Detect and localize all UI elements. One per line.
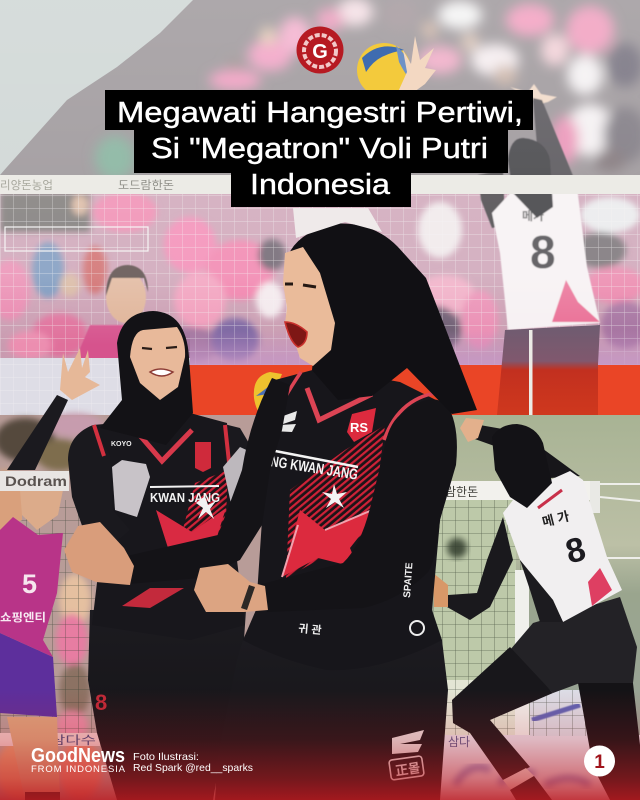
left player left fist (112, 460, 150, 517)
main player left fist (64, 522, 134, 585)
left player left arm (68, 425, 130, 552)
blocker jersey name: 메가 (522, 208, 544, 223)
left player mouth (150, 369, 173, 376)
left player hijab (100, 311, 193, 445)
right player bent leg (452, 647, 553, 780)
blocker raised arm (533, 98, 578, 188)
bottom red fade overlay (0, 690, 640, 800)
main player neck trim (307, 388, 372, 420)
photo credit (133, 751, 253, 774)
lower arena: floor and blurred spectators (0, 413, 640, 800)
left player right shoulder (224, 424, 253, 480)
right player raised arm (472, 424, 580, 478)
photo credit: Red Spark @red__sparks (133, 762, 253, 774)
magenta jersey (0, 517, 63, 657)
footer brand: GoodNews from Indonesia (31, 745, 126, 775)
main player wristband (241, 585, 255, 610)
left player kit logo: KOYO (111, 441, 132, 448)
blocker raised hand (510, 84, 557, 104)
right player jersey side print (520, 560, 563, 622)
lavender advertising board at bottom right (440, 690, 640, 800)
left player collar (137, 430, 192, 461)
lower right player from behind (433, 418, 640, 800)
right player lower arm (447, 517, 513, 620)
main player open mouth (285, 322, 307, 347)
left player right fist (223, 447, 253, 513)
left player hem stripes (122, 588, 184, 608)
photo credit: Foto Ilustrasi: (133, 751, 199, 763)
magenta player shoe (25, 792, 60, 800)
footer brand: GoodNews from Indonesia: FROM INDONESIA (31, 764, 126, 775)
lower arena: floor and blurred spectators: 삼다수 (50, 734, 96, 747)
left player shoulder trim (94, 425, 229, 462)
right player collar print (538, 490, 562, 508)
volleyball top (357, 43, 411, 97)
main player sleeve print: SPAITE (402, 562, 415, 598)
Dodram banner: Dodram (5, 473, 67, 489)
small volleyball mid (254, 372, 282, 418)
main player Skechers logo (271, 411, 297, 432)
crowd behind the net (0, 190, 640, 370)
page number badge (584, 746, 615, 776)
main player left arm (127, 378, 290, 584)
right player hijab (492, 424, 552, 508)
main player shorts (215, 640, 448, 800)
main player right arm (262, 399, 457, 612)
veil fading the upper photo (0, 0, 640, 345)
title line 3: Indonesia (250, 169, 391, 201)
main player shoulder trim (273, 372, 444, 440)
left magenta player with ad banner (0, 471, 69, 800)
footer brand: GoodNews from Indonesia: GoodNews (31, 745, 125, 767)
left player torso (92, 413, 245, 640)
main player red star (282, 505, 384, 577)
logo: GoodNews red circle (296, 26, 344, 74)
right player hand (433, 573, 448, 607)
main player shorts logo (389, 730, 424, 780)
purple haze above red board (190, 330, 640, 366)
left net mesh (5, 227, 148, 251)
main player torso (243, 368, 446, 670)
main player star outline (282, 505, 384, 577)
logo: GoodNews red circle: G (312, 41, 328, 63)
right player jersey (503, 471, 622, 622)
main player badge: RS (350, 420, 368, 435)
right player jersey number: 8 (562, 530, 589, 571)
magenta player arm skin (0, 490, 22, 530)
right player far leg (578, 683, 640, 800)
magenta jersey sponsor: 쇼핑엔티 (0, 611, 46, 624)
left player shorts and legs (88, 610, 246, 800)
blocking hand at ball (398, 36, 436, 92)
left player white star (196, 496, 216, 519)
main player sponsor line (270, 450, 358, 467)
lower boards: white and red (0, 358, 640, 415)
main player badge (347, 408, 376, 442)
left player eyes (142, 347, 177, 349)
blocker jersey pink star (552, 280, 600, 322)
right player jersey pink star (588, 568, 612, 606)
main player shorts logo: 正몰 (394, 760, 421, 778)
magenta jersey number: 5 (22, 569, 37, 599)
blocker in white jersey (478, 84, 600, 330)
blocker other arm (478, 170, 505, 228)
main player hijab (286, 223, 477, 414)
left player red star (156, 508, 226, 548)
right player jersey name: 메 가 (541, 508, 571, 530)
blocker shorts (497, 325, 600, 415)
net panel on lower right: 람한돈 (445, 485, 478, 499)
main player: Megawati (64, 208, 477, 800)
main player hem crest (410, 621, 424, 635)
main player face (283, 247, 335, 366)
main player hem text: 귀 관 (298, 622, 322, 637)
blocker hijab (508, 138, 553, 218)
left player raised hand (60, 348, 102, 400)
left player sponsor text: KWAN JANG (150, 490, 220, 505)
ad band above net: 도드람한돈 (118, 179, 174, 192)
left player badge (195, 442, 211, 472)
left player jersey stripes (178, 470, 228, 548)
left player shorts number: 8 (95, 690, 107, 715)
main player white star (322, 484, 347, 508)
left player raised arm (7, 395, 68, 470)
magenta player face (20, 490, 63, 530)
net panel on lower right (434, 481, 640, 740)
ad band above net (0, 175, 640, 194)
main player jersey stripes (286, 425, 385, 578)
background player behind the net (75, 265, 170, 360)
left player celebrating (7, 311, 253, 800)
left player sponsor line (150, 486, 219, 487)
Dodram banner (0, 471, 69, 491)
title line 2: Si "Megatron" Voli Putri (151, 133, 488, 165)
lavender advertising board at bottom right: 삼다 (448, 735, 470, 749)
main player back collar: jersey behind (293, 208, 382, 238)
ad band above net: 리양돈농업 (0, 179, 53, 192)
right player raised hand (460, 418, 484, 442)
right player shoe (510, 776, 552, 800)
blocker jersey (492, 187, 600, 330)
title block (105, 90, 533, 207)
main player sponsor text: NG KWAN JANG (269, 453, 359, 484)
title line 1: Megawati Hangestri Pertiwi, (117, 97, 523, 129)
main player eyes (285, 284, 316, 287)
magenta player legs (7, 717, 60, 800)
magenta shorts (0, 633, 57, 717)
page number badge: 1 (594, 752, 605, 773)
left player face (130, 327, 185, 400)
net pole with red and white tape (529, 330, 532, 422)
main player right fist (194, 564, 268, 612)
right player sock (503, 768, 534, 790)
blocker jersey number: 8 (530, 226, 556, 278)
photo background: arena wall and upper crowd (0, 0, 640, 200)
right player shorts (510, 597, 637, 693)
